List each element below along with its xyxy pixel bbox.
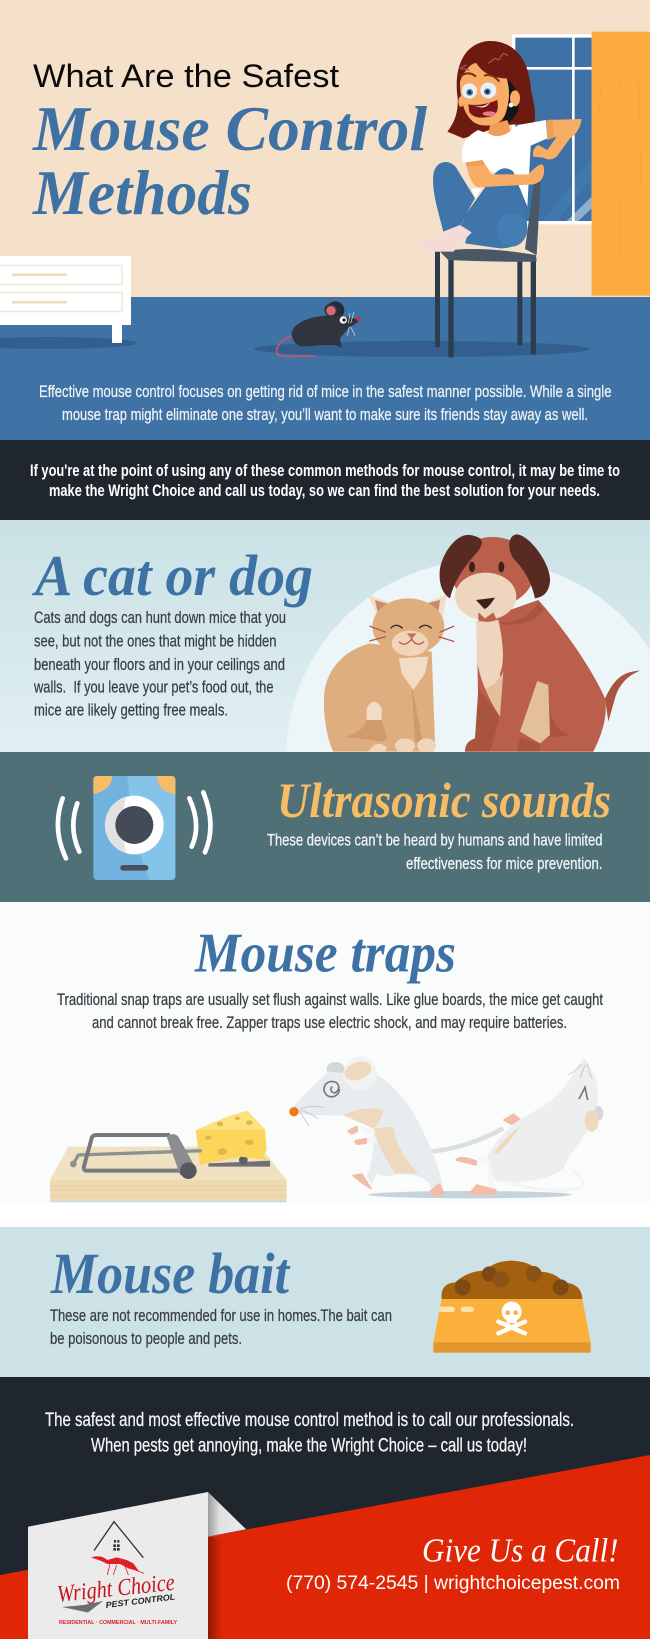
panel: mouse bait: [0, 1227, 650, 1377]
panel: footer: [0, 1377, 650, 1639]
contact details: [286, 1532, 620, 1594]
icon: ultrasonic device: [58, 776, 210, 880]
heading: mouse bait: Mouse bait: [50, 1241, 291, 1306]
illustration: two white mice: [289, 1057, 603, 1198]
logo: red ant: [91, 1556, 144, 1575]
logo: wordmark: Wright Choice: [56, 1570, 176, 1608]
illustration: frightened woman on chair: [417, 41, 582, 358]
panel: a cat or dog: [0, 520, 650, 752]
body text: mouse traps: [57, 990, 603, 1032]
panel: call to action band: [0, 440, 650, 520]
title: Methods: [32, 157, 252, 228]
closing text: [45, 1410, 574, 1456]
floor shadow: [254, 341, 590, 357]
body text: mouse bait: be poisonous to people and pets.: [50, 1329, 242, 1348]
illustration: snap trap with cheese: [50, 1111, 287, 1202]
title: Mouse Control: [32, 93, 427, 164]
body text: mouse bait: [50, 1306, 392, 1348]
logo: wordmark: [56, 1570, 177, 1626]
heading: ultrasonic sounds: Ultrasonic sounds: [277, 772, 611, 828]
illustration: cat: [324, 594, 454, 753]
panel: mouse traps: [0, 902, 650, 1227]
panel: hero scene: [0, 0, 650, 440]
body text: mouse bait: These are not recommended for use in homes.The bait can: [50, 1306, 392, 1325]
panel: ultrasonic sounds: [0, 752, 650, 902]
body text: cat or dog: see, but not the ones that might be hidden: [34, 632, 276, 650]
body text: cat or dog: mice are likely getting free meals.: [34, 700, 228, 720]
body text: cat or dog: [33, 608, 286, 720]
closing text: When pests get annoying, make the Wright Choice – call us today!: [91, 1436, 527, 1456]
dresser: [0, 256, 137, 349]
logo: wordmark: PEST CONTROL: [105, 1592, 176, 1610]
body text: cat or dog: walls. If you leave your pet’s food out, the: [33, 678, 274, 696]
window and curtain: [512, 32, 650, 296]
icon: poison bait bowl: [433, 1261, 591, 1353]
body text: cat or dog: Cats and dogs can hunt down mice that you: [34, 608, 286, 627]
body text: cat or dog: beneath your floors and in your ceilings and: [34, 655, 285, 674]
title: What Are the Safest: [33, 58, 339, 94]
heading: mouse traps: Mouse traps: [194, 922, 456, 984]
heading: a cat or dog: A cat or dog: [32, 543, 313, 608]
illustration: black mouse: [277, 301, 360, 357]
intro text: [39, 382, 612, 424]
contact details: (770) 574-2545 | wrightchoicepest.com: [286, 1573, 620, 1594]
body text: ultrasonic: [267, 830, 602, 873]
title: [32, 58, 427, 228]
illustration: dog: [440, 534, 640, 752]
logo: wordmark: RESIDENTIAL · COMMERCIAL · MULTI-FAMILY: [59, 1620, 177, 1626]
contact details: Give Us a Call!: [422, 1532, 618, 1570]
red diagonal band: [0, 1455, 650, 1639]
logo card: [28, 1492, 246, 1639]
logo: house roof: [94, 1522, 143, 1558]
